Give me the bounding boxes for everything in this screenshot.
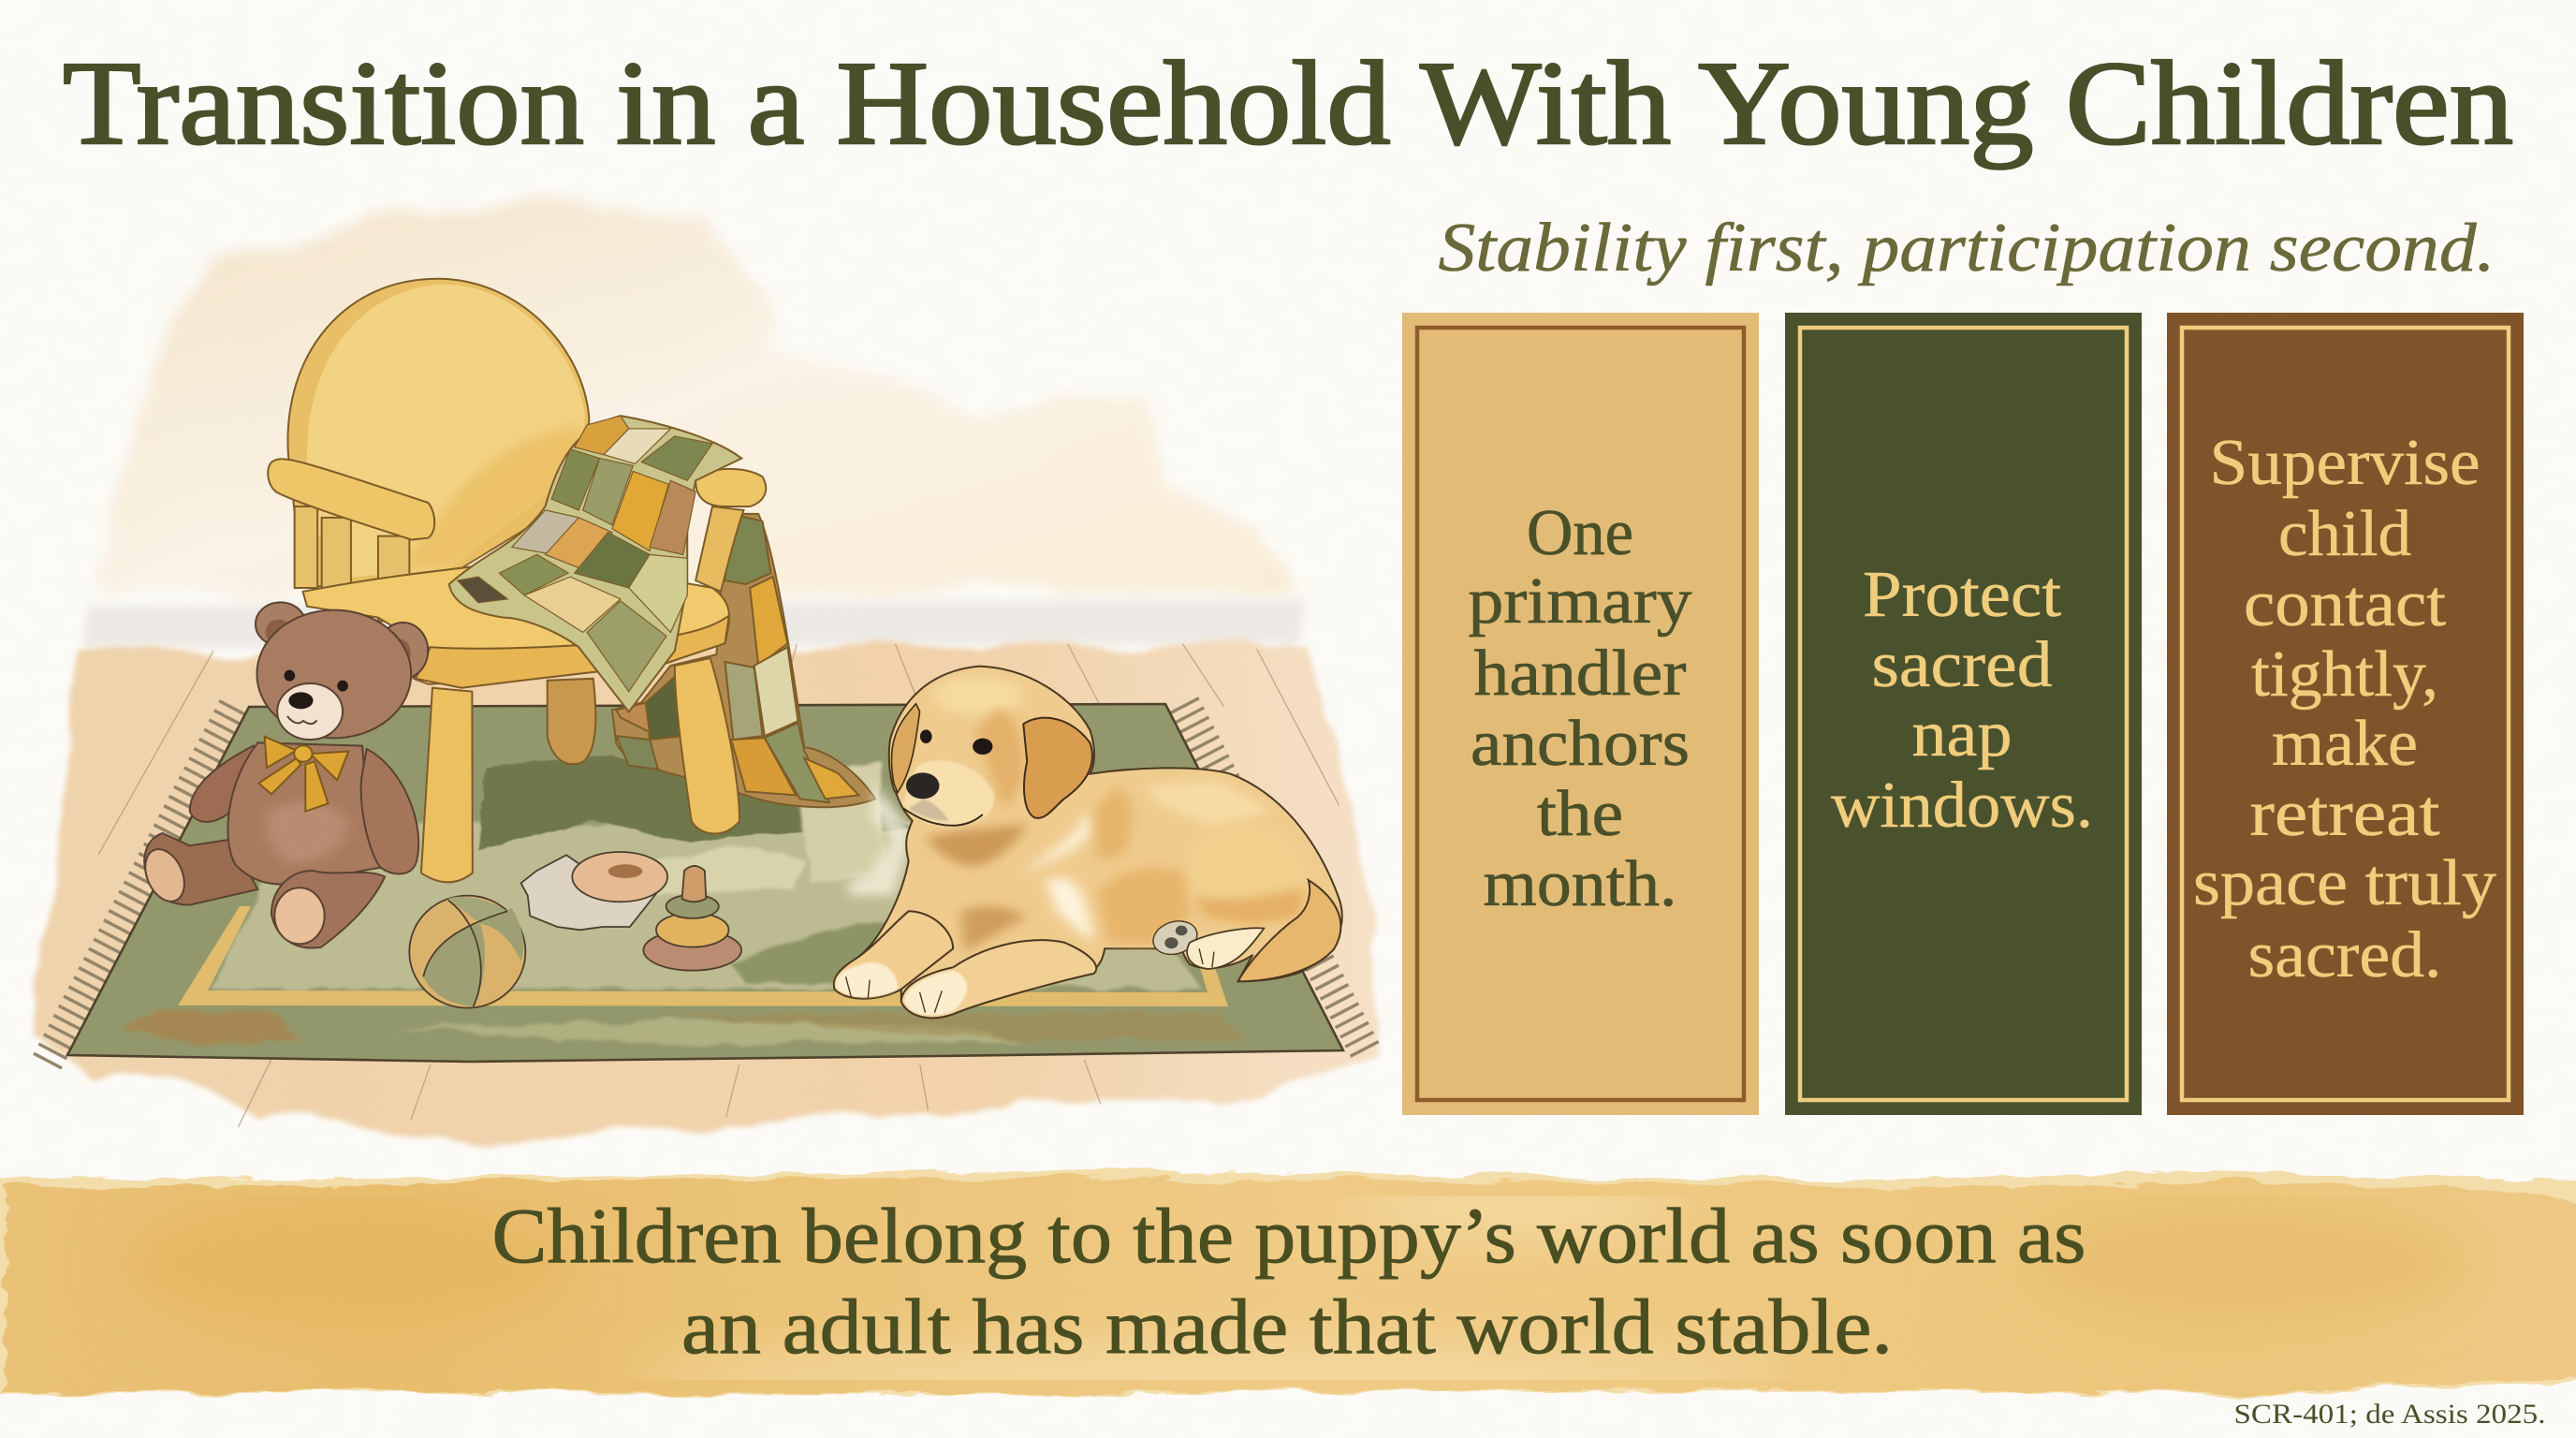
chair front left leg [421, 688, 473, 882]
bear left leg [144, 833, 257, 905]
banner watercolour strip [6, 1178, 2576, 1393]
puppy mouth [903, 808, 983, 826]
rug gold border [178, 906, 1228, 1006]
rug mottled patches [608, 847, 805, 894]
puppy eyes and nose [906, 729, 992, 799]
card 1 text: primary [1468, 565, 1692, 638]
card 2 text: sacred [1872, 629, 2052, 701]
chair back [287, 279, 589, 588]
bear eyes and nose [285, 670, 348, 709]
card 3 text: sacred. [2248, 919, 2441, 991]
puppy muzzle [903, 760, 994, 827]
source citation: SCR-401; de Assis 2025. [2233, 1399, 2546, 1430]
card 1 text: the [1537, 778, 1623, 850]
card 1 text [1468, 497, 1692, 920]
card 1 text: anchors [1471, 708, 1690, 780]
card: protect nap windows [1785, 313, 2142, 1115]
puppy hind back paw [1146, 915, 1205, 961]
teddy bear [139, 602, 428, 948]
chair rear leg [548, 679, 595, 764]
card 3 text [2193, 427, 2496, 991]
bear right leg [271, 871, 385, 948]
puppy silhouette [834, 667, 1342, 1018]
toys [409, 852, 741, 1008]
baseboard [82, 600, 1306, 647]
bear bow [258, 737, 348, 812]
puppy tail [1238, 880, 1340, 981]
chair [268, 279, 875, 882]
bear left arm [190, 746, 271, 822]
banner text: an adult has made that world stable. [681, 1284, 1893, 1371]
puppy right ear [1023, 718, 1092, 818]
card 3 text: contact [2244, 568, 2447, 640]
card: supervise child contact [2167, 313, 2524, 1115]
title: Transition in a Household With Young Children [63, 37, 2513, 169]
card 3 text: child [2278, 498, 2411, 570]
card 1 text: month. [1483, 848, 1677, 920]
card 1 text: One [1527, 497, 1633, 569]
rug dark patch under chair [480, 756, 920, 849]
puppy left ear [891, 704, 920, 793]
bear right arm [361, 749, 418, 873]
banner pale outer wash [0, 1172, 2576, 1395]
puppy fur shading [927, 677, 1310, 952]
illustration: nursery scene with puppy [30, 194, 1377, 1143]
card: one primary handler [1402, 313, 1759, 1115]
chair seat [303, 558, 729, 684]
puppy [834, 667, 1342, 1018]
card 3 text: Supervise [2209, 427, 2481, 499]
banner: takeaway [0, 1172, 2576, 1401]
card 2 text: nap [1911, 698, 2012, 770]
bear ears [256, 602, 305, 646]
toy stacker [643, 866, 741, 971]
banner text [492, 1193, 2086, 1371]
banner tonal patches [131, 1196, 2458, 1380]
bear head [256, 610, 411, 738]
quilt folded part [449, 416, 741, 712]
room background [30, 194, 1377, 1143]
banner text: Children belong to the puppy’s world as soon as [492, 1193, 2086, 1280]
rug [67, 704, 1343, 1062]
chair apron [416, 616, 729, 688]
chair right arm [695, 469, 766, 506]
subtitle: Stability first, participation second. [1438, 210, 2496, 286]
puppy toes [845, 948, 1214, 1013]
card 2 text [1831, 559, 2093, 842]
rug fringe [47, 704, 1367, 1063]
toy ball [409, 896, 525, 1008]
puppy left foreleg [834, 911, 953, 999]
card 3 text: make [2272, 708, 2418, 780]
bear snout [277, 683, 343, 740]
bear body [227, 742, 380, 885]
chair spindles [295, 506, 409, 622]
card 2 text: windows. [1831, 770, 2093, 842]
card 3 text: tightly, [2251, 638, 2438, 711]
card 3 text: space truly [2193, 847, 2496, 919]
chair left arm [268, 459, 434, 540]
card 2 text: Protect [1863, 559, 2062, 631]
quilt hanging part [612, 514, 875, 807]
chair front right leg [675, 658, 739, 833]
wall watercolour wash [98, 194, 1297, 594]
paper halo beside chest [849, 784, 913, 896]
card 1 text: handler [1473, 638, 1687, 710]
card 3 text: retreat [2250, 778, 2440, 850]
floor planks [98, 644, 1339, 1127]
puppy hind foot [1187, 928, 1264, 969]
puppy right foreleg [901, 940, 1096, 1018]
toy teether [521, 852, 667, 930]
chair right support post [695, 506, 744, 592]
floor wash [30, 644, 1377, 1143]
rug inner field [211, 824, 1203, 989]
